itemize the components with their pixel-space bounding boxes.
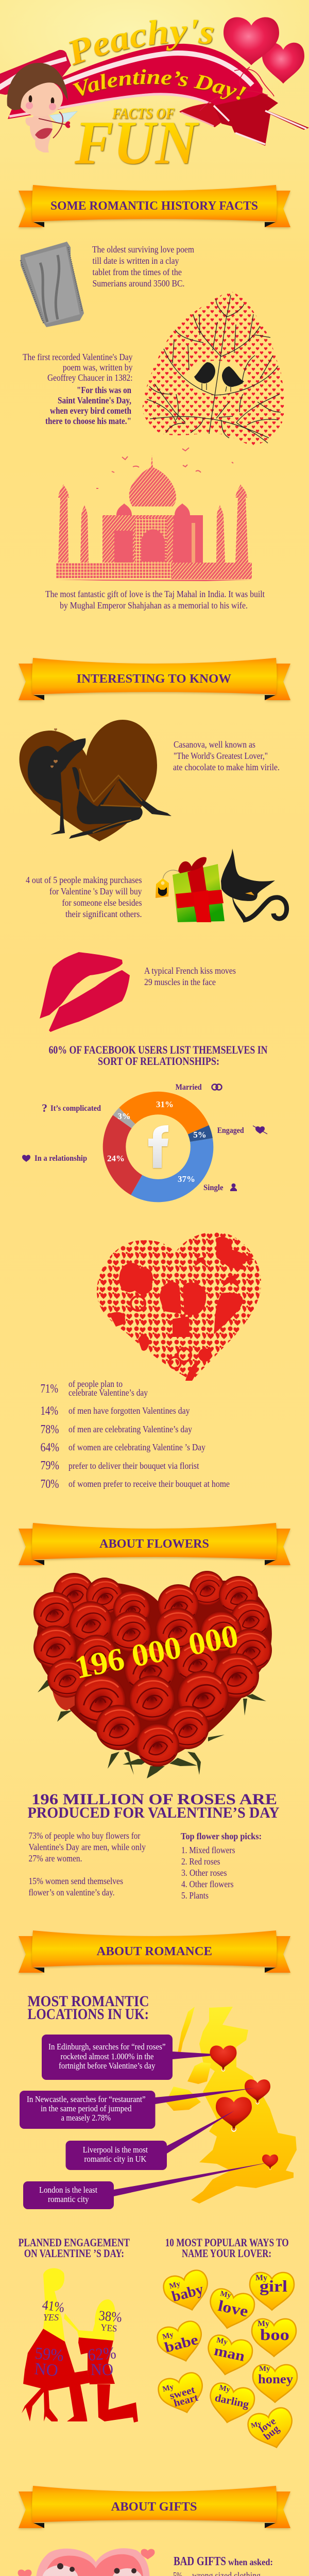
icon: heart tree with birds xyxy=(139,289,288,449)
chart: couple silhouette: 62% xyxy=(87,2344,117,2365)
heart: my love bug xyxy=(246,2405,298,2453)
heading: planned engagement xyxy=(19,2236,130,2260)
stat: 78% xyxy=(40,1423,192,1436)
heart: my babe xyxy=(155,2319,208,2367)
callout: Edinburgh: fortnight before Valentine’s day xyxy=(59,2061,156,2071)
text: four out of five: 4 out of 5 people making purchases xyxy=(26,875,142,885)
text: oldest love poem: Sumerians around 3500 BC. xyxy=(93,278,184,289)
heart: my love: My xyxy=(219,2290,232,2300)
heart: my man: man xyxy=(213,2343,247,2365)
callout: London: London is the least xyxy=(39,2185,97,2195)
text: Casanova xyxy=(173,739,280,772)
section banner: some romantic history facts: SOME ROMANTIC HISTORY FACTS xyxy=(50,199,258,213)
heart: my boo: boo xyxy=(260,2326,289,2344)
callout: Liverpool: Liverpool is the most xyxy=(83,2145,148,2155)
heading: most romantic locations xyxy=(28,1993,149,2023)
text: Casanova: Casanova, well known as xyxy=(174,739,255,750)
stats list xyxy=(40,1379,230,1491)
heading: 196 million roses xyxy=(28,1791,280,1821)
section banner: about flowers: ABOUT FLOWERS xyxy=(99,1537,209,1551)
main building xyxy=(102,515,203,563)
text: who buys flowers: 27% are women. xyxy=(29,1853,82,1863)
heart: my boo: My xyxy=(258,2319,269,2328)
heart: my love: love xyxy=(216,2297,250,2320)
icon: kiss lips xyxy=(40,952,130,1032)
stat: 71%: celebrate Valentine’s day xyxy=(68,1387,148,1398)
text: who buys flowers xyxy=(29,1831,146,1897)
legend: engaged xyxy=(217,1126,267,1135)
heading: most romantic locations: LOCATIONS IN UK: xyxy=(28,2006,149,2023)
heart: my sweet heart: My xyxy=(162,2383,175,2394)
stat: 64%: of women are celebrating Valentine ’s Day xyxy=(68,1442,205,1452)
chart: couple silhouette: YES xyxy=(43,2312,59,2323)
text: Chaucer poem xyxy=(23,352,133,426)
list: bad gifts xyxy=(173,2555,273,2576)
heart: my sweet heart: heart xyxy=(173,2392,199,2409)
stat: 64% xyxy=(40,1441,205,1454)
callout: Edinburgh xyxy=(42,2035,237,2080)
stat: 71% xyxy=(40,1379,148,1398)
callout: Liverpool xyxy=(66,2097,252,2170)
far minarets xyxy=(58,484,248,563)
icon: facebook f xyxy=(148,1125,168,1168)
text: four out of five: their significant others. xyxy=(65,909,142,919)
list: top flower shop picks xyxy=(181,1831,262,1901)
donut chart: 37% xyxy=(178,1174,195,1184)
text: Chaucer poem: The first recorded Valentine's Day xyxy=(23,352,133,362)
donut chart xyxy=(107,1099,207,1191)
list: top flower shop picks: Top flower shop picks: xyxy=(181,1831,262,1841)
ribbon xyxy=(0,44,309,146)
chart: couple silhouette: 41% xyxy=(41,2297,65,2315)
stat: 14% xyxy=(40,1404,190,1418)
heart: my girl xyxy=(250,2273,294,2310)
donut chart: 3% xyxy=(117,1111,131,1121)
Facts of heading: FACTS OF xyxy=(112,105,175,122)
chart: couple silhouette: 38% xyxy=(98,2308,123,2325)
image: heart of roses xyxy=(33,1571,272,1778)
chart: couple silhouette: NO xyxy=(33,2360,59,2380)
heading: planned engagement: ON VALENTINE ’S DAY: xyxy=(24,2247,124,2260)
chart: couple silhouette xyxy=(22,2268,138,2422)
icon: chocolate heart and woman xyxy=(19,720,171,841)
heart: my honey: My xyxy=(259,2365,270,2373)
stat: 78%: 78% xyxy=(40,1423,59,1436)
legend: single: Single xyxy=(203,1183,224,1192)
callout: London: romantic city xyxy=(48,2194,89,2204)
donut chart: 31% xyxy=(156,1099,174,1109)
heart: my girl: My xyxy=(255,2274,267,2282)
section banner: interesting to know xyxy=(19,658,290,700)
callout: Edinburgh: rocketed almost 1.000% in the xyxy=(61,2052,153,2061)
text: Casanova: "The World's Greatest Lover," xyxy=(174,751,268,761)
stat: 14%: 14% xyxy=(40,1404,58,1418)
Peachy's heading: Peachy's xyxy=(69,20,215,66)
platform xyxy=(56,563,171,579)
text: oldest love poem: The oldest surviving love poem xyxy=(92,244,194,255)
stat: 71%: 71% xyxy=(40,1382,58,1396)
text: who buys flowers: 73% of people who buy flowers for xyxy=(29,1831,141,1841)
list: bad gifts: BAD GIFTS xyxy=(174,2555,226,2568)
icon: cupid xyxy=(7,63,77,152)
list: top flower shop picks: 5. Plants xyxy=(181,1890,209,1901)
stat: 79% xyxy=(40,1459,199,1472)
heart: my darling: My xyxy=(218,2384,231,2394)
legend: engaged: Engaged xyxy=(217,1126,244,1135)
callout: Liverpool: romantic city in UK xyxy=(84,2154,147,2164)
heart: my honey xyxy=(253,2365,297,2402)
section banner: interesting to know: INTERESTING TO KNOW xyxy=(76,672,231,686)
chart: couple silhouette: 59% xyxy=(34,2344,64,2365)
stat: 70%: of women prefer to receive their bouquet at home xyxy=(68,1479,230,1489)
spire and dome xyxy=(129,455,176,506)
stat: 78%: of men are celebrating Valentine’s day xyxy=(68,1424,192,1434)
heart: my love xyxy=(205,2287,256,2333)
list: top flower shop picks: 3. Other roses xyxy=(181,1868,227,1878)
heart: my babe: My xyxy=(162,2330,175,2342)
small domes xyxy=(116,503,190,515)
heart: my love bug: bug xyxy=(262,2423,282,2443)
text: oldest love poem xyxy=(92,244,194,289)
text: Taj Mahal: The most fantastic gift of love is the Taj Mahal in India. It was built xyxy=(45,589,265,599)
map: UK xyxy=(166,2007,297,2204)
header title group xyxy=(0,17,309,177)
text: four out of five: for someone else besides xyxy=(62,897,142,908)
list: top flower shop picks: 1. Mixed flowers xyxy=(181,1845,235,1855)
stat: 14%: of men have forgotten Valentines day xyxy=(68,1405,190,1416)
legend: relationship: In a relationship xyxy=(35,1154,87,1163)
stat: 64%: 64% xyxy=(40,1441,59,1454)
callout: Newcastle: in the same period of jumped xyxy=(41,2104,132,2113)
text: Casanova: ate chocolate to make him virile. xyxy=(173,762,280,772)
text: who buys flowers: 15% women send themselves xyxy=(29,1876,123,1886)
text: Chaucer poem: there to choose his mate." xyxy=(45,416,131,426)
callout: Edinburgh: In Edinburgh, searches for “red roses” xyxy=(48,2042,166,2052)
heading: Facebook: SORT OF RELATIONSHIPS: xyxy=(98,1055,219,1067)
callout: Newcastle xyxy=(20,2079,270,2129)
heart: my darling xyxy=(205,2381,256,2427)
heading: 196 million roses: PRODUCED FOR VALENTINE’S DAY xyxy=(28,1804,280,1821)
image: clay tablet xyxy=(21,242,84,327)
section banner: about romance: ABOUT ROMANCE xyxy=(97,1945,212,1958)
heart: my baby: baby xyxy=(170,2281,205,2305)
text: Chaucer poem: "For this was on xyxy=(77,385,131,395)
icon: gift box and cat xyxy=(156,849,287,922)
legend: complicated: ? xyxy=(42,1101,47,1114)
text: Chaucer poem: when every bird cometh xyxy=(50,405,131,416)
inner minarets xyxy=(80,505,225,563)
heart: my man xyxy=(203,2333,254,2379)
text: who buys flowers: Valentine's Day are men, while only xyxy=(29,1842,146,1852)
list: top flower shop picks: 2. Red roses xyxy=(181,1856,220,1867)
list: bad gifts: when asked: xyxy=(228,2557,273,2567)
heart: my darling: darling xyxy=(214,2391,250,2411)
callout: London xyxy=(23,2155,278,2209)
donut chart: 5% xyxy=(193,1130,207,1140)
heart: my honey: honey xyxy=(258,2372,294,2386)
big number: 196 000 000 xyxy=(72,1618,241,1686)
image: Taj Mahal sketch xyxy=(56,448,252,581)
text: four out of five: for Valentine 's Day will buy xyxy=(49,886,142,896)
heading: most romantic locations: MOST ROMANTIC xyxy=(28,1993,149,2010)
heading: ways to name your lover: NAME YOUR LOVER: xyxy=(182,2247,271,2260)
heading: 196 million roses: 196 MILLION OF ROSES ARE xyxy=(31,1791,277,1808)
heart: my love bug: My xyxy=(250,2420,262,2430)
list: top flower shop picks: 4. Other flowers xyxy=(181,1879,234,1889)
text: Taj Mahal: by Mughal Emperor Shahjahan as a memorial to his wife. xyxy=(60,600,248,611)
legend: married xyxy=(176,1083,221,1092)
legend: married: Married xyxy=(176,1083,202,1092)
text: four out of five xyxy=(26,875,142,919)
section banner: about flowers xyxy=(19,1523,290,1565)
heading: ways to name your lover xyxy=(165,2236,289,2260)
section banner: some romantic history facts xyxy=(19,185,290,227)
stat: 79%: prefer to deliver their bouquet via florist xyxy=(68,1461,199,1471)
text: French kiss xyxy=(144,965,236,987)
heading: planned engagement: PLANNED ENGAGEMENT xyxy=(19,2236,130,2249)
Fun heading: FUN xyxy=(74,108,199,177)
chart: couple silhouette: NO xyxy=(91,2361,113,2379)
illustration: pandas on heart xyxy=(18,2548,154,2576)
text: Chaucer poem: Geoffrey Chaucer in 1382: xyxy=(47,372,133,383)
callout: Newcastle: In Newcastle, searches for “restaurant” xyxy=(27,2094,145,2104)
heart: my babe: babe xyxy=(163,2332,200,2356)
text: oldest love poem: tablet from the times of the xyxy=(93,267,182,277)
stat: 70% xyxy=(40,1478,230,1491)
text: oldest love poem: till date is written in a clay xyxy=(93,256,179,266)
heart: my girl: girl xyxy=(260,2277,287,2295)
heart: my baby: My xyxy=(168,2280,181,2291)
text: Taj Mahal xyxy=(45,589,265,611)
stat: 71%: of people plan to xyxy=(68,1379,123,1389)
section banner: about gifts xyxy=(19,2486,290,2528)
Valentine's Day heading: Valentine’s Day! xyxy=(73,69,247,101)
text: Chaucer poem: Saint Valentine's Day, xyxy=(58,395,131,405)
heart: my love bug: love xyxy=(257,2415,278,2435)
heading: Facebook xyxy=(48,1043,268,1067)
section banner: about romance xyxy=(19,1930,290,1973)
legend: single xyxy=(203,1183,237,1192)
text: French kiss: 29 muscles in the face xyxy=(144,977,216,987)
icon: heart balloons xyxy=(224,17,304,83)
text: French kiss: A typical French kiss moves xyxy=(144,965,236,976)
text: Chaucer poem: poem was, written by xyxy=(63,362,133,372)
callout: Newcastle: a measely 2.78% xyxy=(61,2113,111,2123)
birds xyxy=(96,448,233,488)
heart: my baby xyxy=(161,2268,214,2316)
donut chart: 24% xyxy=(107,1154,125,1163)
text: who buys flowers: flower’s on valentine’s day. xyxy=(29,1887,114,1897)
heart: my boo xyxy=(252,2319,296,2357)
heart: my sweet heart: sweet xyxy=(168,2384,196,2402)
section banner: about gifts: ABOUT GIFTS xyxy=(111,2500,197,2514)
legend: complicated xyxy=(42,1101,101,1114)
legend: complicated: It’s complicated xyxy=(50,1104,101,1113)
heart: my sweet heart xyxy=(156,2370,209,2418)
heart: my man: My xyxy=(216,2336,229,2347)
stat: 70%: 70% xyxy=(40,1478,59,1491)
chart: couple silhouette: YES xyxy=(100,2322,117,2334)
icon: heart of love symbols xyxy=(97,1232,261,1381)
stat: 79%: 79% xyxy=(40,1459,59,1472)
